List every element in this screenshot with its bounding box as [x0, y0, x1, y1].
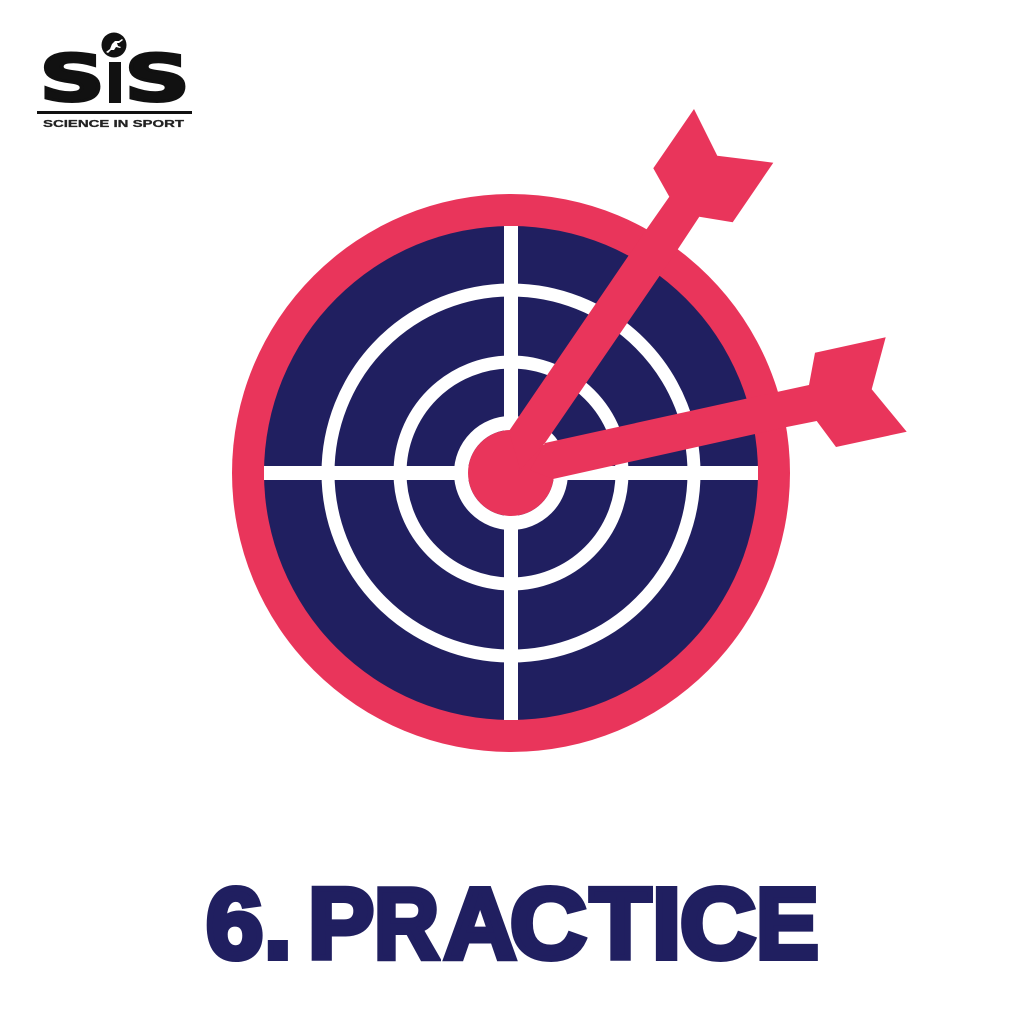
logo wordmark SIS: S: [40, 41, 105, 116]
title: P: [308, 868, 374, 980]
arrow: upper: [509, 109, 773, 470]
title: A: [444, 868, 516, 980]
title: C: [510, 868, 587, 980]
logo wordmark SIS: S: [124, 41, 190, 116]
logo tagline: SCIENCE IN SPORT: [43, 118, 185, 130]
logo: Science in Sport: [37, 32, 192, 130]
target white rings and crosshair: [264, 226, 758, 720]
logo wordmark SIS: [40, 41, 190, 116]
arrow: right: [530, 337, 907, 479]
title: R: [374, 868, 439, 980]
title: .: [264, 868, 292, 980]
target outer ring: [232, 194, 790, 752]
logo rule: [37, 111, 192, 114]
target navy face: [264, 226, 758, 720]
title: I: [652, 868, 681, 980]
logo runner badge: [102, 32, 126, 58]
target board: [232, 194, 790, 752]
title: C: [680, 868, 756, 980]
title: E: [756, 868, 819, 980]
target bullseye: [468, 430, 554, 516]
title: 6: [206, 868, 263, 980]
title: T: [590, 868, 651, 980]
title: [206, 868, 819, 980]
